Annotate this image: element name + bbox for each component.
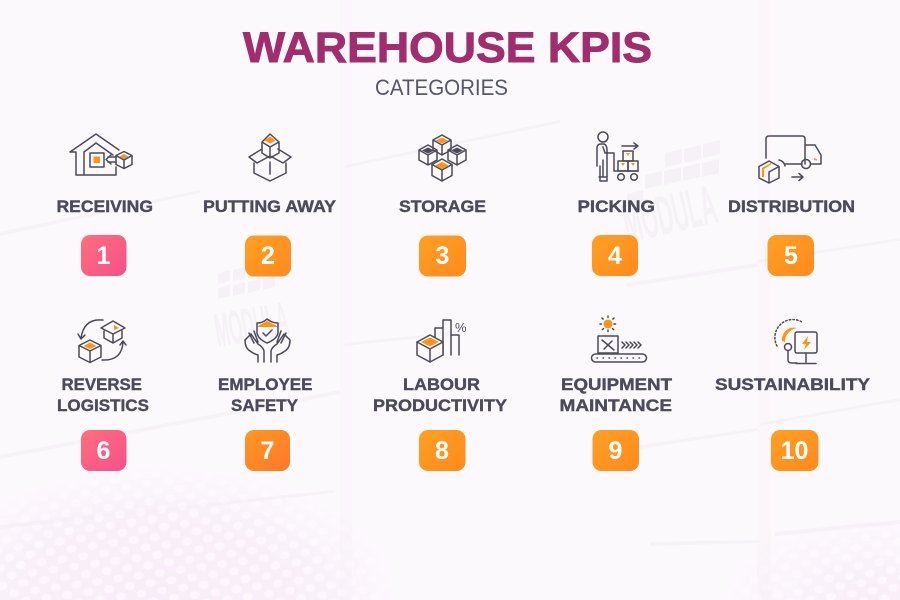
icon: returning boxes: [78, 320, 126, 362]
icon: conveyor belt with box: [592, 316, 646, 362]
category 7: employee safety: [218, 319, 312, 471]
category 2: putting away: [203, 134, 337, 276]
number badge: [245, 430, 290, 471]
category 10: sustainability: [715, 320, 871, 471]
label: [373, 375, 508, 415]
label: REVERSE: [62, 375, 142, 394]
icon: warehouse receiving: [70, 134, 132, 175]
label: LOGISTICS: [57, 396, 149, 415]
number badge: 9: [609, 437, 622, 465]
number badge: [81, 430, 126, 471]
icon: worker pushing cart: [597, 132, 638, 181]
background: [0, 496, 900, 600]
title: WAREHOUSE KPIS: [243, 24, 652, 72]
watermark: Modula centre left: MODULA: [211, 293, 293, 358]
watermark: Modula upper right: [617, 140, 722, 255]
number badge: [592, 430, 639, 471]
number badge: [771, 430, 818, 471]
label: STORAGE: [399, 197, 486, 216]
category 1: receiving: [56, 134, 153, 276]
number badge: 3: [436, 242, 449, 270]
category 5: distribution: [728, 136, 855, 276]
label: SUSTAINABILITY: [715, 375, 871, 394]
icon: solar powered charger: [775, 320, 817, 364]
number badge: 7: [261, 437, 274, 465]
category 9: equipment maintenance: [560, 316, 673, 471]
number badge: [419, 236, 466, 276]
icon: delivery truck and parcel: [759, 136, 821, 183]
number badge: [81, 235, 126, 276]
number badge: 4: [608, 242, 622, 270]
category 3: storage: [399, 135, 486, 276]
label: EMPLOYEE: [218, 375, 312, 394]
icon: stacked cubes: [419, 135, 466, 181]
category 4: picking: [578, 132, 655, 276]
number badge: [419, 430, 466, 471]
number badge: [245, 236, 291, 276]
label: DISTRIBUTION: [728, 197, 855, 216]
icon: cube with bars: [417, 320, 459, 362]
label: LABOUR: [403, 375, 480, 394]
number badge: 2: [261, 242, 275, 270]
category 8: labour productivity: [373, 320, 508, 471]
label: SAFETY: [231, 396, 299, 415]
label: PUTTING AWAY: [203, 197, 337, 216]
label: [560, 375, 673, 415]
category 6: reverse logistics: [57, 320, 149, 471]
icon: shield held by hands: [245, 319, 290, 362]
label: RECEIVING: [56, 197, 153, 216]
label: [218, 375, 312, 415]
number badge: [592, 235, 638, 276]
percent sign: %: [455, 320, 467, 335]
number badge: 1: [97, 242, 111, 270]
label: EQUIPMENT: [561, 375, 673, 394]
icon: open box with cube: [249, 134, 291, 181]
watermark: Modula upper right: MODULA: [617, 174, 722, 255]
number badge: 10: [781, 437, 808, 465]
number badge: 6: [97, 437, 110, 465]
label: [57, 375, 149, 415]
subtitle: CATEGORIES: [375, 75, 508, 100]
watermark: Modula centre left: [211, 261, 293, 358]
label: PICKING: [578, 197, 655, 216]
number badge: 5: [784, 242, 798, 270]
label: MAINTANCE: [560, 396, 672, 415]
label: PRODUCTIVITY: [373, 396, 508, 415]
number badge: 8: [435, 437, 449, 465]
